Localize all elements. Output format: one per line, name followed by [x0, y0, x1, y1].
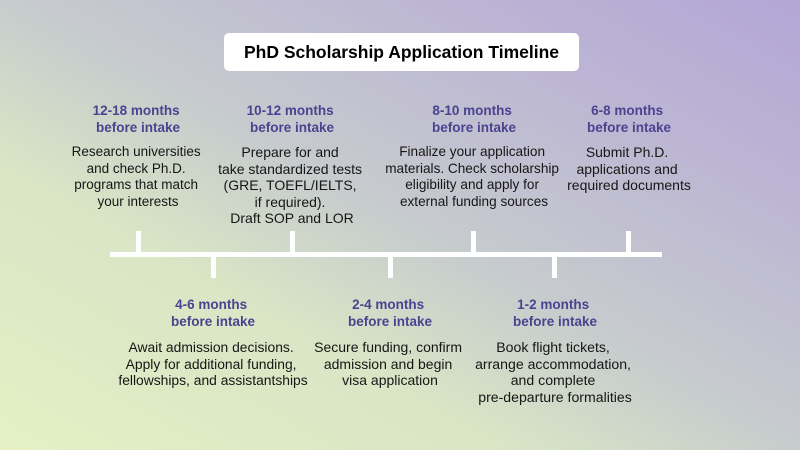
milestone: 12-18 months: your interests: [97, 194, 179, 208]
milestone: 10-12 months: Draft SOP and LOR: [230, 210, 354, 226]
milestone: 12-18 months: programs that match: [74, 177, 198, 192]
milestone: 6-8 months: required documents: [567, 177, 691, 193]
milestone: 2-4 months: visa application: [342, 372, 438, 388]
milestone: 4-6 months: before intake: [171, 314, 255, 328]
milestone: 4-6 months: 4-6 months: [175, 297, 247, 312]
milestone: 6-8 months: 6-8 months: [591, 103, 663, 118]
milestone: 12-18 months: and check Ph.D.: [87, 160, 186, 176]
milestone: 2-4 months: admission and begin: [324, 356, 452, 372]
milestone: 10-12 months: Prepare for and: [241, 144, 339, 160]
milestone: 6-8 months: [567, 103, 691, 193]
milestone: 10-12 months: take standardized tests: [218, 160, 362, 176]
timeline axis: [110, 231, 662, 278]
milestone: 1-2 months: before intake: [513, 314, 597, 328]
milestone: 10-12 months: if required).: [255, 194, 325, 210]
milestone: 8-10 months: Finalize your application: [399, 144, 545, 159]
milestone: 2-4 months: before intake: [348, 314, 432, 328]
milestone: 4-6 months: fellowships, and assistantships: [118, 372, 308, 388]
title: [224, 33, 579, 71]
title: PhD Scholarship Application Timeline: [244, 42, 559, 62]
milestone: 2-4 months: [314, 297, 462, 388]
milestone: 4-6 months: [118, 297, 308, 388]
milestone: 10-12 months: before intake: [250, 120, 334, 134]
milestone: 6-8 months: before intake: [587, 120, 671, 134]
milestone: 1-2 months: arrange accommodation,: [475, 356, 631, 372]
milestone: 8-10 months: [385, 103, 559, 209]
milestone: 10-12 months: [218, 103, 362, 226]
milestone: 2-4 months: 2-4 months: [352, 297, 424, 312]
milestone: 10-12 months: 10-12 months: [247, 103, 334, 118]
milestone: 8-10 months: before intake: [432, 120, 516, 134]
milestone: 10-12 months: (GRE, TOEFL/IELTS,: [224, 177, 357, 193]
milestone: 4-6 months: Apply for additional funding,: [126, 356, 296, 372]
milestone: 1-2 months: pre-departure formalities: [478, 388, 632, 404]
milestone: 8-10 months: 8-10 months: [432, 103, 512, 118]
milestone: 1-2 months: and complete: [511, 372, 595, 388]
milestone: 8-10 months: eligibility and apply for: [405, 177, 539, 192]
milestone: 12-18 months: Research universities: [72, 144, 201, 159]
milestone: 12-18 months: before intake: [96, 120, 180, 134]
milestone: 12-18 months: [72, 103, 201, 209]
milestone: 1-2 months: [475, 297, 632, 405]
milestone: 8-10 months: materials. Check scholarship: [385, 160, 559, 176]
milestone: 4-6 months: Await admission decisions.: [128, 339, 294, 355]
milestone: 6-8 months: applications and: [576, 160, 678, 176]
milestone: 6-8 months: Submit Ph.D.: [586, 144, 668, 160]
milestone: 1-2 months: Book flight tickets,: [496, 339, 610, 355]
milestone: 2-4 months: Secure funding, confirm: [314, 339, 462, 355]
milestone: 1-2 months: 1-2 months: [517, 297, 589, 312]
milestone: 12-18 months: 12-18 months: [93, 103, 180, 118]
milestone: 8-10 months: external funding sources: [400, 194, 548, 208]
